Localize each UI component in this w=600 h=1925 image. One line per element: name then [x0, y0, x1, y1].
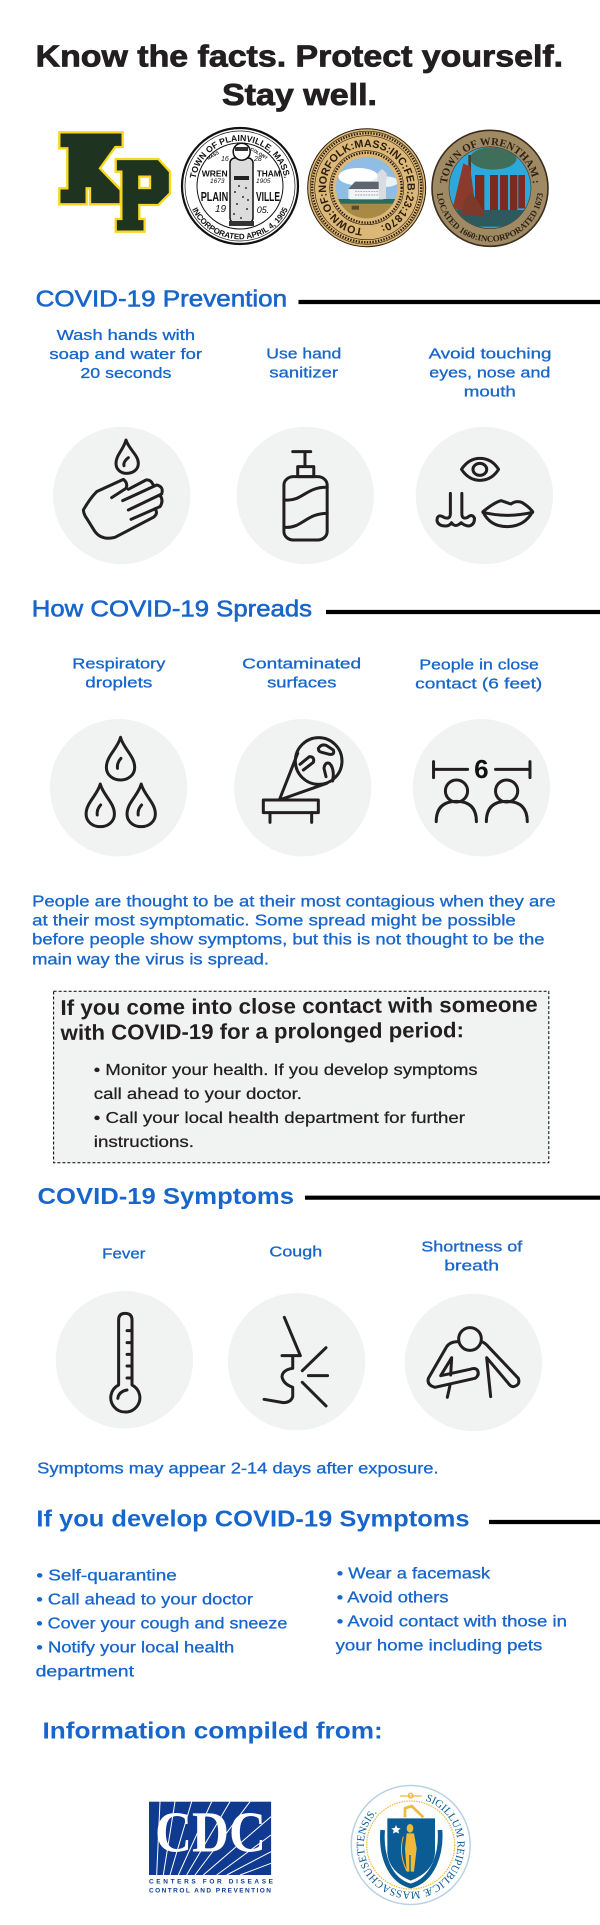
- icon: thermometer: [56, 1291, 193, 1428]
- icon: people six feet apart: [413, 719, 550, 856]
- label: hand sanitizer: [266, 346, 341, 381]
- text block: contagion paragraph: [32, 894, 556, 969]
- logo: Town of Plainville seal: COLONY: [250, 147, 269, 160]
- text block: contagion paragraph: main way the virus is spread.: [32, 952, 269, 969]
- label: avoid touching: Avoid touching: [429, 346, 552, 362]
- label: close contact: People in close: [419, 657, 539, 673]
- label: avoid touching: [429, 346, 552, 400]
- callout list: instructions.: [94, 1134, 194, 1151]
- label: close contact: contact (6 feet): [415, 676, 542, 692]
- callout list: call ahead to your doctor.: [94, 1086, 302, 1103]
- logo: CDC: CENTERS FOR DISEASE: [149, 1879, 274, 1886]
- icon: shortness of breath: [405, 1294, 542, 1431]
- panel: symptoms: [56, 1239, 542, 1431]
- logo: Town of Plainville seal: 28: [253, 156, 262, 163]
- label: hand sanitizer: Use hand: [266, 346, 341, 362]
- list: actions right: • Wear a facemask: [337, 1566, 491, 1583]
- callout heading: If you come into close contact with someone: [60, 993, 538, 1020]
- label: shortness of breath: [421, 1239, 523, 1274]
- text block: contagion paragraph: People are thought to be at their most contagious when they are: [32, 894, 556, 911]
- panel: prevention: [49, 328, 553, 564]
- title: Stay well.: [222, 77, 377, 112]
- logo: Town of Plainville seal: PLAIN: [201, 189, 228, 204]
- logo: Town of Plainville seal: 1673: [210, 178, 225, 185]
- label: shortness of breath: breath: [444, 1258, 499, 1274]
- list: actions right: • Avoid others: [337, 1590, 449, 1607]
- icon: droplets: [50, 719, 187, 856]
- logo: Town of Wrentham seal: LOCATED 1660:INCORPORATED 1673: [436, 192, 543, 242]
- icon: sanitizer bottle: [237, 427, 374, 564]
- list: actions right: [336, 1566, 567, 1655]
- list: actions left: • Notify your local health: [36, 1640, 234, 1657]
- label: wash hands: [49, 328, 202, 382]
- callout list: • Call your local health department for further: [94, 1110, 465, 1127]
- logo: Town of Plainville seal: 05.: [257, 205, 269, 215]
- list: actions right: your home including pets: [336, 1638, 543, 1655]
- list: actions left: • Self-quarantine: [36, 1568, 177, 1585]
- list: actions left: • Call ahead to your doctor: [36, 1592, 253, 1609]
- label: close contact: [415, 657, 542, 692]
- logo: Town of Plainville seal: INCORPORATED APRIL 4, 1905: [192, 207, 288, 240]
- logo: Town of Plainville seal: 19: [215, 204, 227, 215]
- label: contaminated surfaces: surfaces: [267, 675, 336, 691]
- logo: KP: [59, 132, 170, 232]
- list: actions left: [36, 1568, 287, 1681]
- list: actions left: department: [36, 1664, 135, 1681]
- logo: Town of Norfolk seal: TOWN:OF:NORFOLK:MASS:INC:FEB:23:1870:: [318, 140, 415, 236]
- logo: Town of Wrentham seal: [431, 130, 549, 248]
- label: respiratory droplets: Respiratory: [72, 656, 166, 672]
- label: shortness of breath: Shortness of: [421, 1239, 523, 1255]
- icon: people six feet apart: 6: [474, 754, 489, 784]
- heading: If you develop COVID-19 Symptoms: If you develop COVID-19 Symptoms: [36, 1506, 470, 1532]
- label: wash hands: 20 seconds: [80, 366, 171, 382]
- logo: Town of Plainville seal: 16: [221, 156, 229, 163]
- logo: Town of Norfolk seal: [307, 128, 426, 248]
- callout list: [94, 1062, 478, 1151]
- label: fever: Fever: [102, 1246, 145, 1262]
- icon: cough: [228, 1293, 365, 1430]
- icon: hand and water drop: [53, 427, 190, 564]
- heading: COVID-19 Symptoms: COVID-19 Symptoms: [38, 1183, 294, 1209]
- callout heading: with COVID-19 for a prolonged period:: [60, 1018, 464, 1045]
- title: Know the facts. Protect yourself.: [36, 39, 563, 74]
- label: cough: Cough: [269, 1245, 322, 1261]
- label: respiratory droplets: droplets: [85, 675, 152, 691]
- label: wash hands: Wash hands with: [57, 328, 195, 344]
- label: wash hands: soap and water for: [49, 347, 202, 363]
- label: respiratory droplets: [72, 656, 166, 691]
- text block: contagion paragraph: before people show symptoms, but this is not thought to be the: [32, 932, 545, 949]
- heading: COVID-19 Prevention: COVID-19 Prevention: [36, 286, 287, 312]
- logo: Town of Plainville seal: VILLE: [256, 189, 280, 204]
- text block: incubation note: Symptoms may appear 2-14 days after exposure.: [37, 1460, 439, 1477]
- callout list: • Monitor your health. If you develop symptoms: [94, 1062, 478, 1079]
- list: actions left: • Cover your cough and sneeze: [36, 1616, 287, 1633]
- logo: Town of Plainville seal: THAM: [257, 169, 281, 179]
- heading: Information compiled from: Information compiled from:: [42, 1717, 383, 1743]
- logos row: [58, 126, 549, 248]
- logo: Massachusetts seal: SIGILLUM REIPUBLICÆ MASSACHUSETTENSIS.: [356, 1794, 465, 1899]
- logo: Town of Plainville seal: MASS: [206, 150, 220, 161]
- label: avoid touching: eyes, nose and: [429, 365, 550, 381]
- icon: contaminated surface: [234, 719, 371, 856]
- panel: spread: [50, 656, 550, 856]
- callout: close contact guidance: [54, 991, 549, 1163]
- logo: Town of Plainville seal: WREN: [202, 169, 228, 179]
- logo: CDC: CONTROL AND PREVENTION: [149, 1887, 271, 1894]
- label: avoid touching: mouth: [464, 384, 516, 400]
- heading: How COVID-19 Spreads: How COVID-19 Spreads: [32, 596, 312, 622]
- label: contaminated surfaces: [242, 656, 361, 691]
- list: actions right: • Avoid contact with those in: [337, 1614, 567, 1631]
- label: contaminated surfaces: Contaminated: [242, 656, 361, 672]
- icon: eye, nose and mouth: [416, 427, 553, 564]
- text block: contagion paragraph: at their most symptomatic. Some spread might be possible: [32, 913, 516, 930]
- logo: CDC: [149, 1800, 274, 1894]
- logo: CDC: CDC: [155, 1800, 266, 1865]
- logo: Town of Plainville seal: TOWN OF PLAINVILLE, MASS.: [190, 135, 290, 178]
- title: [36, 39, 563, 112]
- callout heading: [59, 993, 538, 1045]
- label: hand sanitizer: sanitizer: [269, 365, 338, 381]
- logo: Town of Plainville seal: [180, 126, 300, 246]
- logo: Town of Wrentham seal: TOWN OF WRENTHAM :: [440, 138, 539, 183]
- logo: Town of Plainville seal: 1905: [256, 178, 271, 185]
